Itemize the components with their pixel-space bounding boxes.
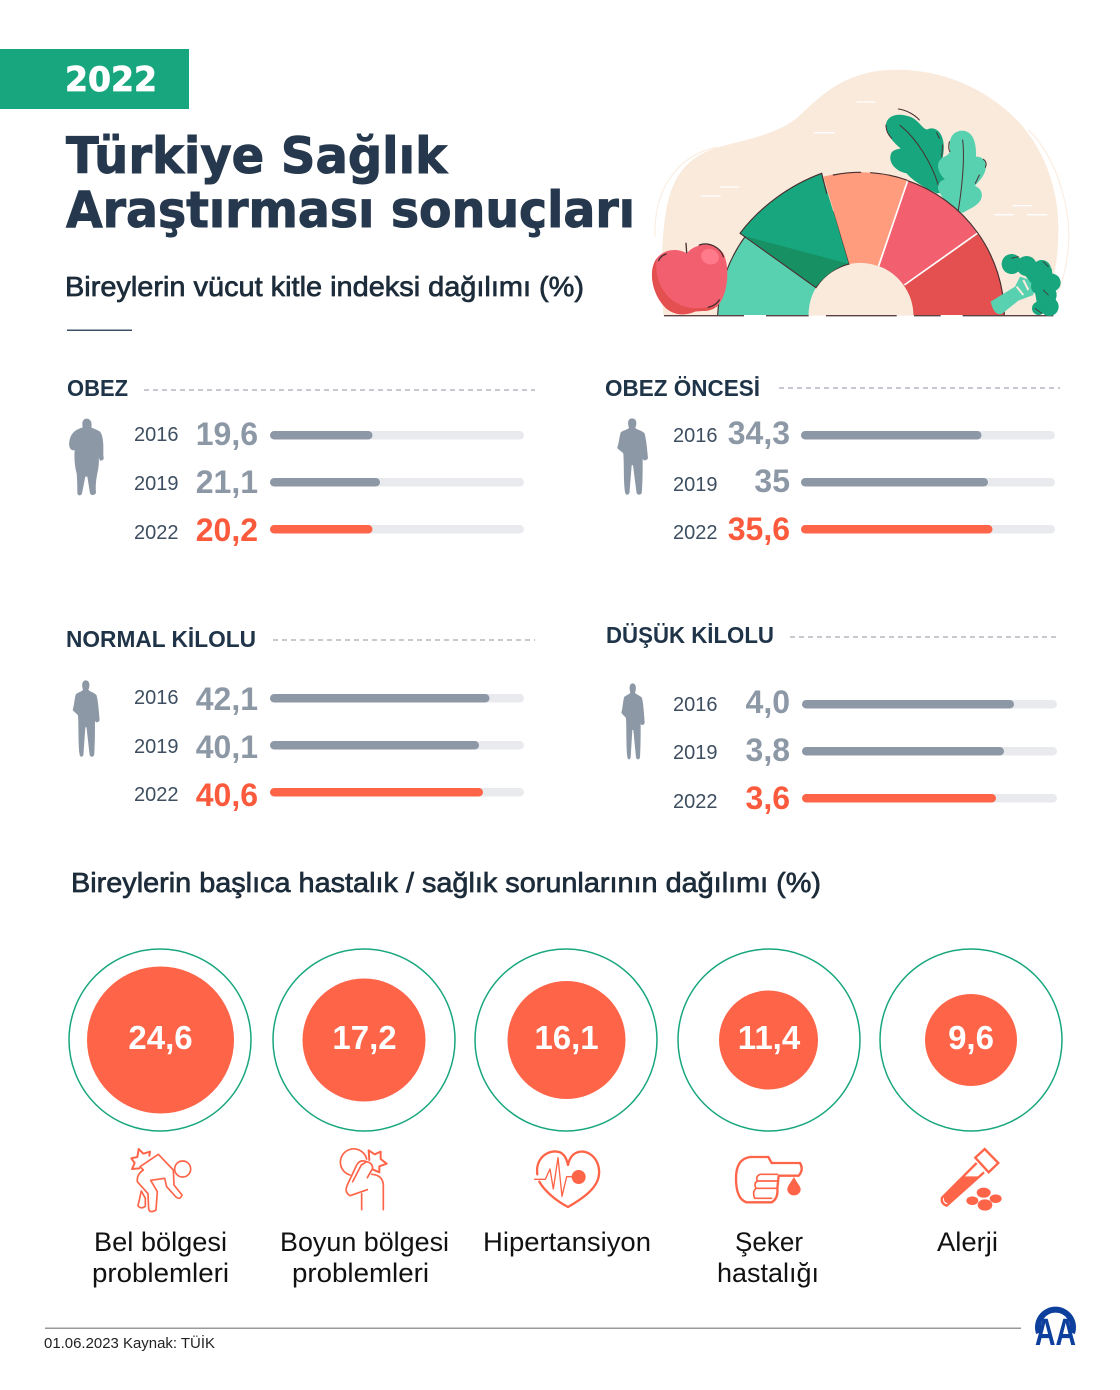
row 2022: 40,6 [196, 777, 258, 813]
dark leaf [886, 115, 950, 193]
row 2019 [673, 463, 1055, 499]
bubble 17,2 [273, 949, 455, 1131]
illustration: gauge with apple, leaves and broccoli [652, 70, 1069, 316]
panel: Hipertansiyon [475, 949, 657, 1257]
label: Şeker [735, 1227, 803, 1257]
row 2019 [134, 729, 524, 765]
row 2019: 40,1 [196, 729, 258, 765]
gauge centre [809, 263, 913, 316]
label: hastalığı [717, 1258, 819, 1288]
heading: DÜŞÜK KİLOLU: DÜŞÜK KİLOLU [606, 622, 774, 648]
heading: diseases and health problems: Bireylerin başlıca hastalık / sağlık sorunlarının dağılımı (%) [71, 867, 821, 898]
gauge: pink segment [879, 181, 977, 285]
apple [652, 245, 727, 314]
row 2019: 35 [754, 463, 790, 499]
heading: OBEZ ÖNCESİ: OBEZ ÖNCESİ [605, 375, 760, 401]
row 2019: 2019 [134, 736, 178, 758]
row 2016 [673, 684, 1057, 720]
label: problemleri [92, 1258, 229, 1288]
icon: neck pain [340, 1149, 387, 1210]
label [717, 1227, 819, 1288]
row 2022: 2022 [673, 791, 718, 813]
row 2022 [134, 512, 524, 548]
panel: NORMAL KİLOLU [66, 626, 535, 813]
row 2022: 2022 [673, 522, 718, 544]
row 2022: 20,2 [196, 512, 258, 548]
row 2016 [134, 681, 524, 717]
icon: underweight body [621, 683, 645, 759]
row 2019: 21,1 [196, 464, 258, 500]
row 2019: 2019 [134, 473, 178, 495]
heading: OBEZ: OBEZ [67, 375, 128, 401]
label: Hipertansiyon [483, 1227, 651, 1257]
icon: obese body [69, 419, 104, 495]
panel: Şeker hastalığı [678, 949, 860, 1288]
bubble 16,1 [475, 949, 657, 1131]
row 2022 [134, 777, 524, 813]
label: problemleri [292, 1258, 429, 1288]
bubble 9,6 [880, 949, 1062, 1131]
label: Bel bölgesi [94, 1227, 227, 1257]
title [66, 127, 635, 239]
row 2019: 2019 [673, 742, 718, 764]
row 2019: 2019 [673, 474, 718, 496]
row 2022: 2022 [134, 522, 178, 544]
row 2016: 2016 [673, 694, 718, 716]
row 2016 [134, 416, 524, 452]
icon: overweight body [617, 418, 648, 495]
label [92, 1227, 229, 1288]
row 2016: 34,3 [728, 415, 790, 451]
gauge: dark green segment [740, 173, 849, 288]
row 2022 [673, 511, 1055, 547]
bubble 16,1: 16,1 [534, 1019, 599, 1056]
icon: normal body [73, 680, 100, 757]
light leaf [938, 131, 986, 213]
bubble 11,4: 11,4 [738, 1019, 801, 1056]
row 2022: 3,6 [746, 780, 790, 816]
source text: 01.06.2023 Kaynak: TÜİK [44, 1334, 215, 1352]
row 2016: 2016 [134, 687, 178, 709]
row 2016: 19,6 [196, 416, 258, 452]
panel: OBEZ ÖNCESİ [605, 375, 1060, 547]
title: Araştırması sonuçları [66, 181, 635, 239]
footer line [45, 1328, 1021, 1329]
heading: NORMAL KİLOLU: NORMAL KİLOLU [66, 626, 256, 652]
panel: Boyun bölgesi problemleri [273, 949, 455, 1288]
panel: Alerji [880, 949, 1062, 1257]
row 2016: 4,0 [746, 684, 790, 720]
panel: OBEZ [67, 375, 535, 548]
bubble 11,4 [678, 949, 860, 1131]
blob background [662, 70, 1058, 315]
row 2016: 42,1 [196, 681, 258, 717]
row 2019 [673, 732, 1057, 768]
icon: test tube and cells [942, 1149, 1002, 1211]
row 2022: 35,6 [728, 511, 790, 547]
panel: Bel bölgesi problemleri [69, 949, 251, 1288]
label: Boyun bölgesi [280, 1227, 449, 1257]
bubble 17,2: 17,2 [332, 1019, 397, 1056]
year banner [0, 49, 189, 109]
icon: finger with blood drop [736, 1157, 802, 1202]
panel: DÜŞÜK KİLOLU [606, 622, 1060, 816]
gauge: red segment [903, 233, 1004, 315]
gauge: light green segment [718, 237, 816, 315]
broccoli [991, 254, 1061, 316]
year banner: 2022 [65, 60, 157, 100]
label: Alerji [937, 1227, 998, 1257]
icon: heart with pulse [535, 1151, 599, 1207]
row 2016 [673, 415, 1055, 451]
label [280, 1227, 449, 1288]
ground line [664, 314, 1053, 318]
row 2016: 2016 [673, 425, 718, 447]
row 2019 [134, 464, 524, 500]
bubble 9,6: 9,6 [948, 1019, 994, 1056]
row 2016: 2016 [134, 424, 178, 446]
row 2022: 2022 [134, 784, 178, 806]
title: Türkiye Sağlık [66, 127, 449, 185]
bubble 24,6 [69, 949, 251, 1131]
gauge: salmon segment [823, 172, 908, 266]
row 2022 [673, 780, 1057, 816]
row 2019: 3,8 [746, 732, 790, 768]
logo: AA: AA [1035, 1312, 1076, 1354]
subtitle: body mass index: Bireylerin vücut kitle indeksi dağılımı (%) [65, 271, 584, 302]
icon: back pain [131, 1149, 191, 1212]
bubble 24,6: 24,6 [128, 1019, 193, 1056]
